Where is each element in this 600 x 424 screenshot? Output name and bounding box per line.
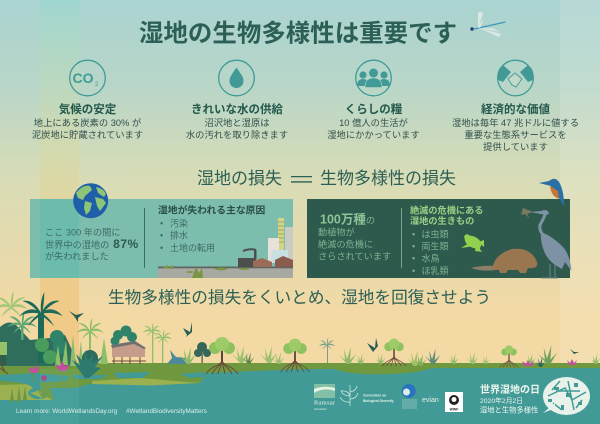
text: 87 percent: 世界中の湿地の 87% <box>45 237 139 251</box>
heading: main causes: 湿地が失われる主な原因 <box>158 204 265 216</box>
equals sign <box>291 176 312 183</box>
logo: WWF <box>445 392 463 412</box>
benefit: climate <box>32 60 143 140</box>
icon: people <box>356 60 391 96</box>
title: 湿地の生物多様性は重要です <box>139 20 457 48</box>
icon: water drop <box>219 60 254 96</box>
logo: CBD: Biological Diversity <box>363 399 394 403</box>
icon: CO2: 2 <box>95 82 99 88</box>
list: causes: • <box>160 243 163 253</box>
list: causes: 排水 <box>170 230 188 240</box>
list: causes: • <box>160 230 163 240</box>
footer links: #WetlandBiodiversityMatters <box>126 408 207 415</box>
icon: CO2: CO <box>72 70 94 86</box>
list: causes: • <box>160 218 163 228</box>
text: livelihoods: 湿地にかかっています <box>327 129 420 140</box>
illustration: industry <box>158 218 293 278</box>
list: threatened: 水鳥 <box>422 252 440 264</box>
land <box>0 363 600 400</box>
panel: species at risk <box>307 199 570 278</box>
text: water: 沼沢地と湿原は <box>204 117 270 128</box>
shrubs <box>179 337 600 367</box>
World Wetlands Day label <box>480 383 540 414</box>
house <box>110 326 146 364</box>
logo: Ramsar: Ramsar <box>314 400 336 406</box>
heading: threatened <box>410 204 484 226</box>
blue structure <box>167 350 190 364</box>
list: threatened: • <box>412 254 415 264</box>
text: one million species: 動植物が <box>318 226 355 238</box>
World Wetlands Day label: 2020年2月2日 <box>480 396 523 405</box>
panel: loss of wetlands <box>30 183 293 278</box>
section heading <box>197 169 456 188</box>
footer links: Learn more: WorldWetlandsDay.org <box>16 408 118 415</box>
text: 87 percent <box>45 226 139 262</box>
text: livelihoods: 10 億人の生活が <box>339 117 409 128</box>
heading: livelihoods: くらしの糧 <box>345 102 403 116</box>
list: threatened: ほ乳類 <box>422 265 449 276</box>
birds <box>69 311 579 354</box>
heading: threatened: 絶滅の危機にある <box>410 204 484 216</box>
heading: economy: 経済的な価値 <box>481 102 550 116</box>
logo: evian: evian <box>422 397 439 404</box>
text: climate: 地上にある炭素の 30% が <box>34 117 142 128</box>
text: economy: 重要な生態系サービスを <box>464 129 567 140</box>
heading: threatened: 湿地の生きもの <box>410 215 474 226</box>
logo: World Wetlands Day emblem <box>543 377 590 415</box>
text: economy: 提供しています <box>483 141 548 152</box>
text: 87 percent: ここ 300 年の間に <box>45 226 121 238</box>
list: threatened: 両生類 <box>422 240 449 252</box>
section heading: 生物多様性の損失 <box>320 169 456 188</box>
logo: Ramsar: Convention <box>314 408 327 411</box>
benefit: livelihoods <box>327 60 420 140</box>
text: climate <box>32 117 143 140</box>
text: economy: 湿地は毎年 47 兆ドルに値する <box>452 117 579 128</box>
list: threatened: • <box>412 266 415 276</box>
olive shore <box>0 378 200 400</box>
icon: dragonfly <box>470 12 506 37</box>
logo: CBD: Convention on <box>363 394 386 398</box>
text: one million species: 100万種の <box>320 212 375 226</box>
pools <box>0 372 205 399</box>
benefit: economy <box>452 60 579 152</box>
list: causes: 汚染 <box>170 218 188 228</box>
list: threatened: • <box>412 230 415 240</box>
list: causes <box>160 218 215 253</box>
World Wetlands Day label: 湿地と生物多様性 <box>480 406 538 414</box>
text: livelihoods <box>327 117 420 140</box>
water <box>0 367 600 424</box>
text: one million species: さらされています <box>318 252 391 262</box>
text: water: 水の汚れを取り除きます <box>186 129 288 140</box>
wetland flowers <box>522 359 577 366</box>
icon: CO2 <box>70 60 105 96</box>
text: 87 percent: が失われました <box>45 250 109 262</box>
icon: handshake <box>498 60 533 96</box>
text: water <box>186 117 288 140</box>
list: threatened: は虫類 <box>422 228 449 240</box>
text: economy <box>452 117 579 152</box>
section heading: 湿地の損失 <box>197 169 282 188</box>
footer links <box>16 408 207 415</box>
list: threatened: • <box>412 242 415 252</box>
text: one million species <box>318 212 391 262</box>
logo: CBD <box>340 385 394 406</box>
slogan: 生物多様性の損失をくいとめ、湿地を回復させよう <box>108 288 491 307</box>
icon: globe <box>73 183 108 218</box>
icon: heron <box>521 208 572 278</box>
mangroves <box>206 337 238 374</box>
illustration: wetland scene <box>0 291 600 424</box>
band tint over water <box>40 369 79 424</box>
forest <box>0 291 108 402</box>
World Wetlands Day label: 世界湿地の日 <box>480 383 540 396</box>
heading: climate: 気候の安定 <box>59 102 117 116</box>
lotus flowers <box>28 361 70 382</box>
icon: beaver <box>471 249 537 273</box>
text: climate: 泥炭地に貯蔵されています <box>32 129 143 140</box>
decorative vertical band <box>40 0 79 369</box>
heading: water: きれいな水の供給 <box>191 102 283 116</box>
logo: Danone fund <box>402 384 417 409</box>
icon: frog <box>461 233 484 252</box>
palms <box>152 331 153 363</box>
logo: Ramsar <box>314 384 336 411</box>
text: one million species: 絶滅の危機に <box>318 238 373 250</box>
benefit: water <box>186 60 288 140</box>
icon: kingfisher <box>539 179 564 206</box>
list: causes: 土地の転用 <box>170 242 215 253</box>
logo: WWF: WWF <box>450 408 459 412</box>
list: threatened <box>412 228 449 276</box>
